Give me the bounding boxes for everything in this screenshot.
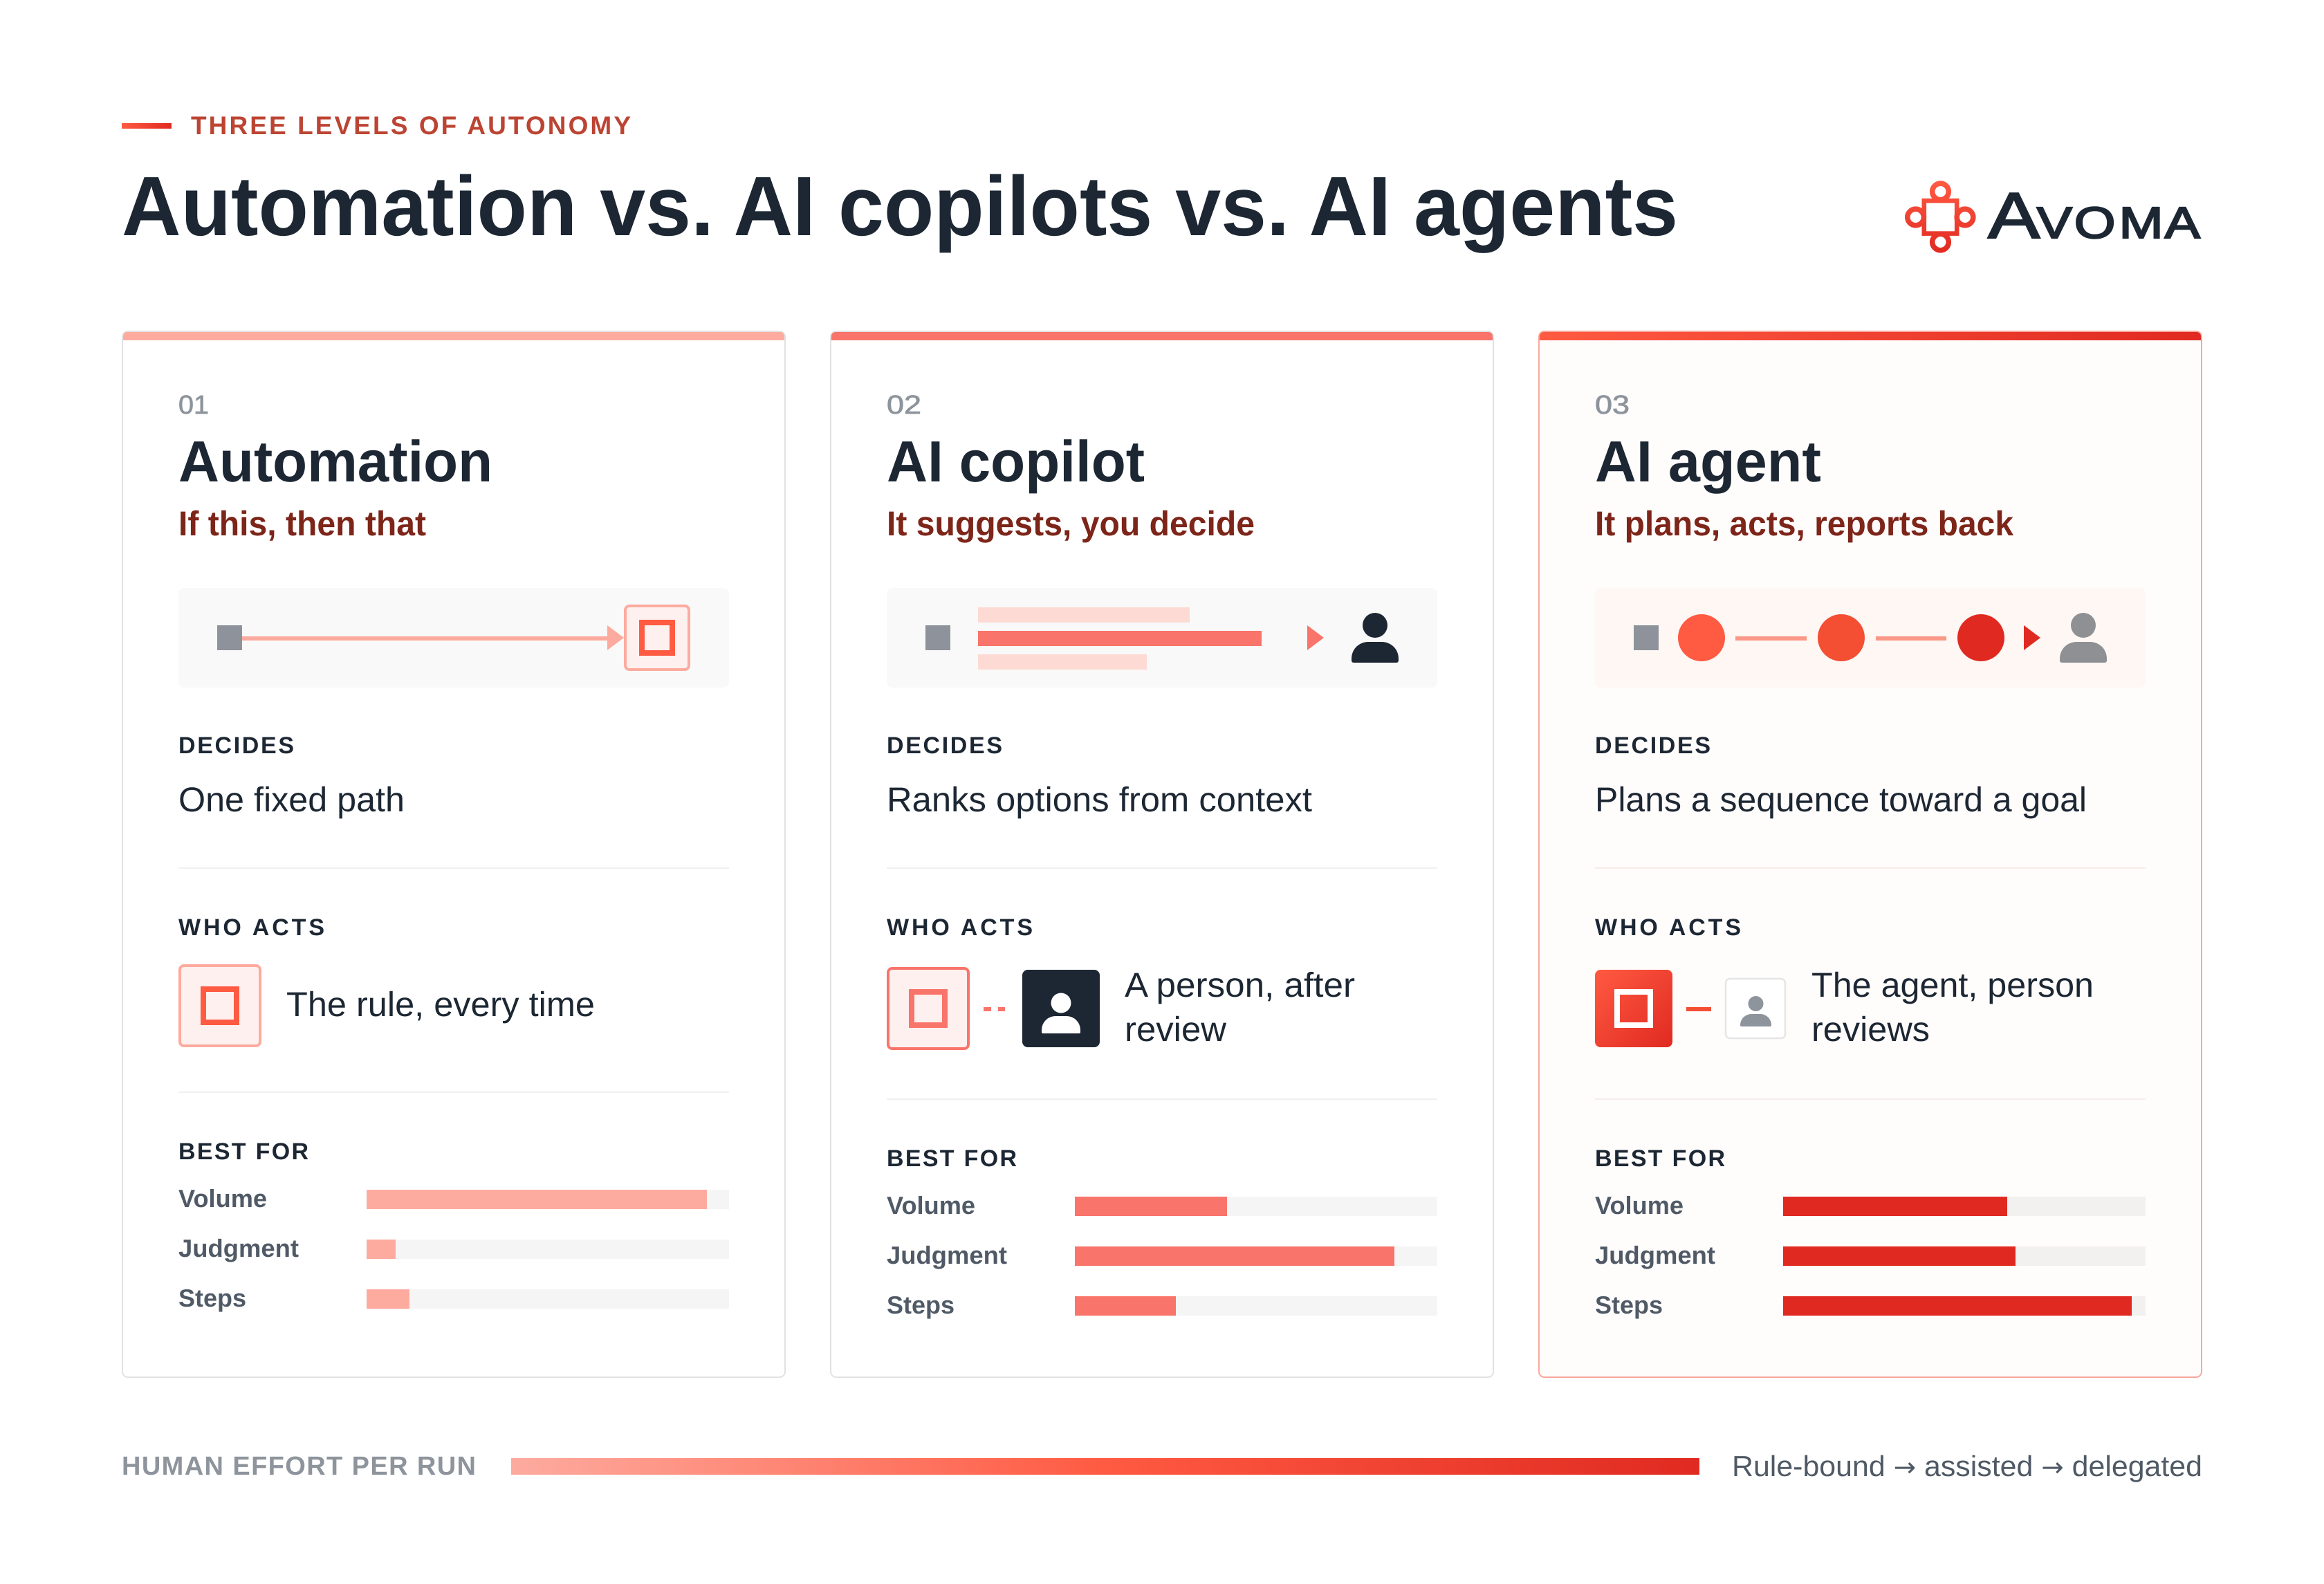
card tagline: It suggests, you decide (887, 504, 1255, 543)
icon: person (1022, 970, 1100, 1047)
card number: 02 (887, 391, 921, 420)
card tagline: If this, then that (178, 504, 426, 543)
title: Automation vs. AI copilots vs. AI agents (122, 159, 1678, 253)
logo wordmark: A (2165, 198, 2200, 248)
best for chart: Steps (887, 1291, 954, 1319)
who acts section: WHO ACTS (1595, 914, 1741, 941)
who acts text: reviews (1811, 1010, 1930, 1049)
best for chart (1595, 1145, 2146, 1319)
card heading: AI agent (1595, 429, 1821, 494)
panel: automation (122, 331, 785, 1377)
best for chart: Volume (1595, 1191, 1684, 1219)
best for chart: Judgment (178, 1234, 299, 1262)
decides section: Plans a sequence toward a goal (1595, 780, 2087, 819)
scale caption: Rule-bound → assisted → delegated (1732, 1450, 2202, 1482)
best for chart (887, 1145, 1437, 1319)
who acts text: review (1125, 1010, 1227, 1049)
diagram: fixed path (178, 588, 729, 688)
icon: reviewer (1726, 979, 1785, 1038)
logo wordmark: V (2037, 198, 2072, 248)
best for chart (178, 1139, 729, 1312)
diagram: plan sequence (1595, 588, 2146, 688)
decides section (887, 733, 1312, 819)
who acts text: The agent, person (1811, 966, 2094, 1004)
who acts section (178, 914, 595, 1046)
card heading: AI copilot (887, 429, 1145, 494)
panel: AI copilot (831, 331, 1493, 1377)
dashed connector (984, 1007, 1005, 1011)
icon: rule box (180, 966, 260, 1046)
best for chart: Steps (178, 1284, 246, 1312)
best for chart: Judgment (1595, 1241, 1715, 1269)
decides section (1595, 733, 2087, 819)
icon: rule box (888, 968, 968, 1049)
card number: 03 (1595, 391, 1630, 420)
scale label: HUMAN EFFORT PER RUN (122, 1452, 476, 1481)
card number: 01 (178, 391, 209, 420)
best for chart: Volume (178, 1184, 267, 1213)
card top bar (831, 332, 1493, 340)
connector (1686, 1007, 1711, 1011)
decides section: DECIDES (1595, 733, 1710, 759)
who acts section (1595, 914, 2094, 1049)
decides section: DECIDES (887, 733, 1002, 759)
gradient bar (511, 1458, 1699, 1475)
decides section: Ranks options from context (887, 780, 1312, 819)
header (122, 111, 1678, 253)
logo wordmark: A (1988, 179, 2040, 252)
card top bar (1540, 332, 2201, 340)
diagram: ranked options to person (887, 588, 1437, 688)
decides section (178, 733, 405, 819)
eyebrow text: THREE LEVELS OF AUTONOMY (191, 111, 631, 140)
best for chart: BEST FOR (887, 1145, 1017, 1172)
best for chart: Steps (1595, 1291, 1663, 1319)
who acts text: A person, after (1125, 966, 1355, 1004)
best for chart: BEST FOR (178, 1139, 308, 1165)
logo mark (1908, 183, 1973, 250)
card background (831, 331, 1493, 1377)
logo wordmark: O (2074, 198, 2116, 248)
who acts section: The rule, every time (286, 985, 595, 1024)
footer scale (122, 1450, 2202, 1482)
best for chart: Judgment (887, 1241, 1007, 1269)
card heading: Automation (178, 429, 492, 494)
who acts section: WHO ACTS (887, 914, 1033, 941)
decides section: DECIDES (178, 733, 294, 759)
logo: Avoma (1908, 179, 2200, 252)
card top bar (123, 332, 784, 340)
eyebrow dash (122, 123, 172, 129)
icon: agent box (1595, 970, 1672, 1047)
card background (122, 331, 785, 1377)
card tagline: It plans, acts, reports back (1595, 504, 2013, 543)
who acts section: WHO ACTS (178, 914, 324, 941)
panel: AI agent (1539, 331, 2202, 1377)
best for chart: Volume (887, 1191, 975, 1219)
decides section: One fixed path (178, 780, 405, 819)
logo wordmark: M (2119, 198, 2164, 248)
best for chart: BEST FOR (1595, 1145, 1725, 1172)
who acts section (887, 914, 1355, 1049)
card background (1539, 331, 2202, 1377)
